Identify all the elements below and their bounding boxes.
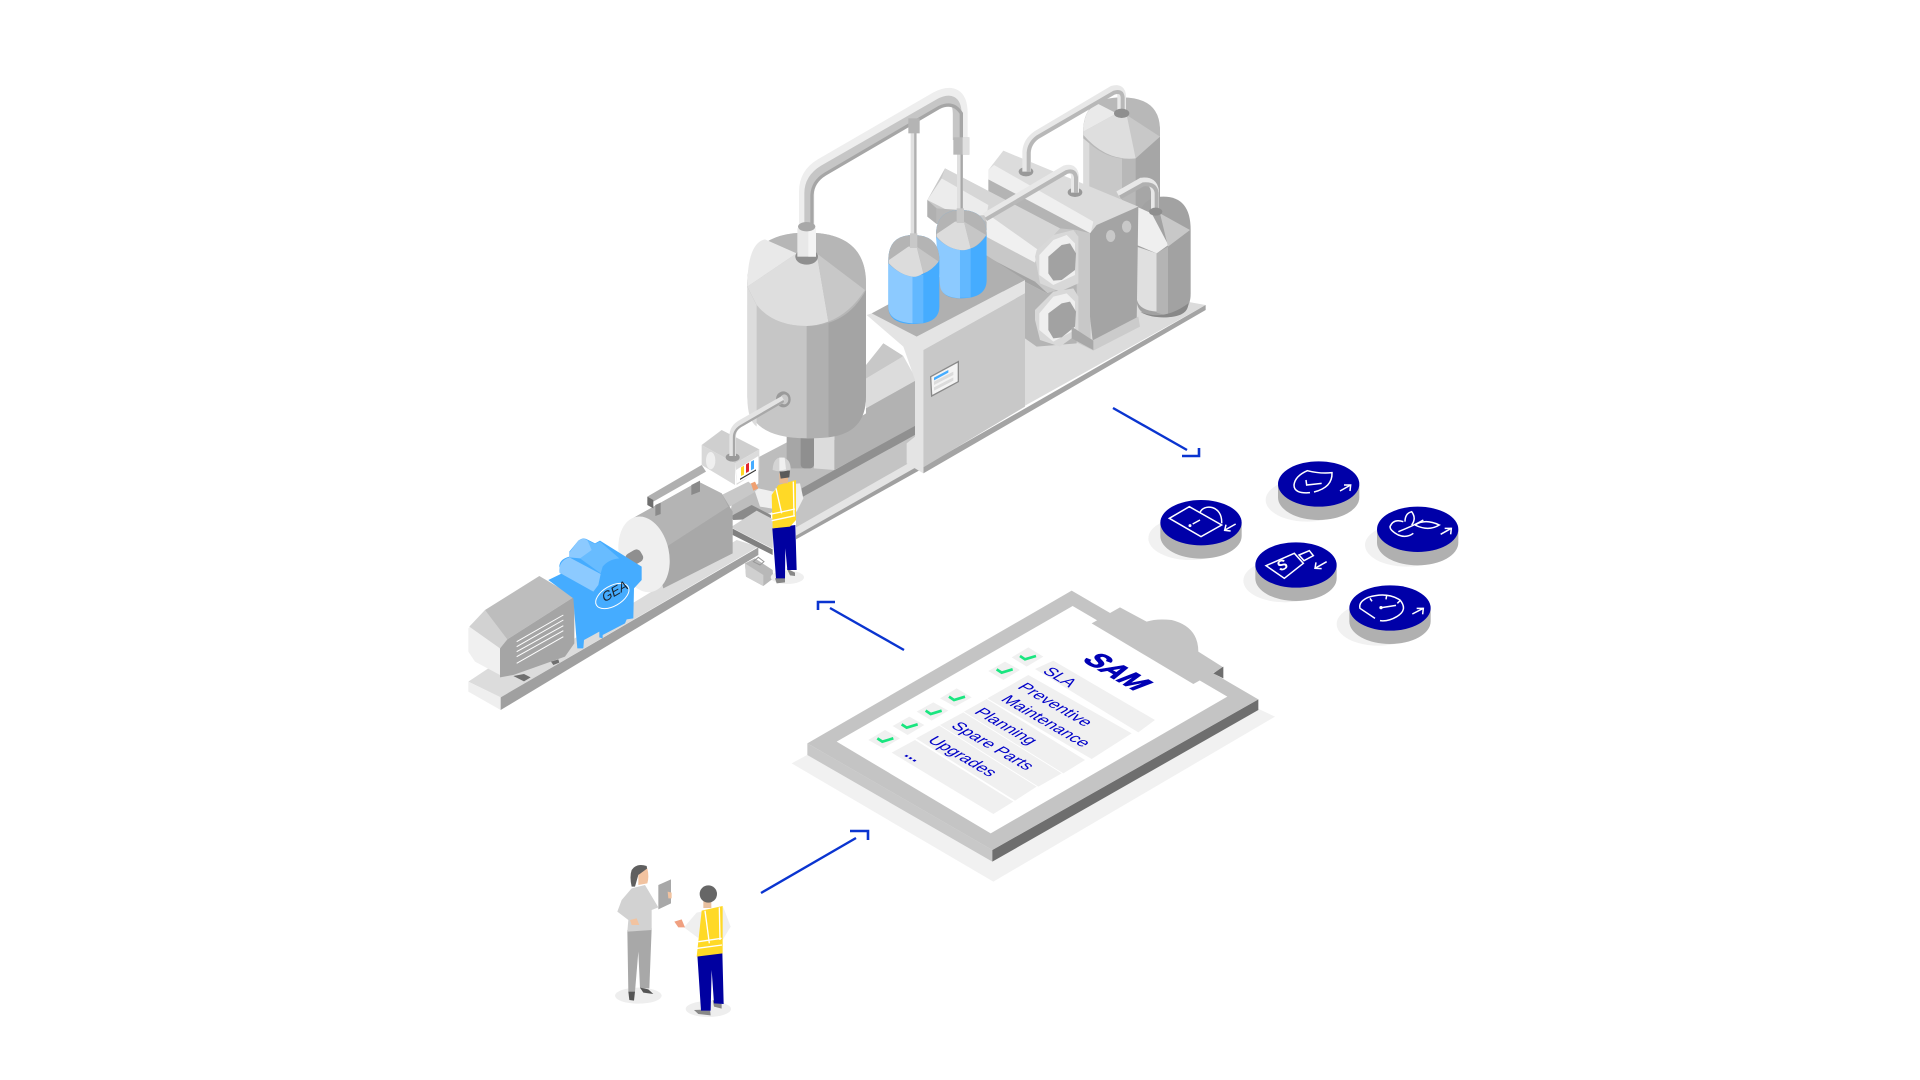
drum housing [612,482,733,597]
checklist labels [900,664,1098,779]
toolbox [745,557,773,586]
cabinet screen [931,362,958,396]
green check marks [877,656,1036,742]
checklist rows [868,647,1155,814]
lower machine body and floor [730,424,920,539]
instrument box [702,430,759,485]
clipboard shadow [792,703,1275,882]
pipe couplers and flanges [795,109,1162,265]
control block [988,151,1140,351]
left base platform [468,540,758,710]
right blue tank [936,210,987,298]
person: man in safety vest [674,885,731,1017]
coin: cost [1243,542,1337,602]
blue gearbox: GEA [601,577,629,606]
drum rail [647,465,706,516]
checklist labels: Maintenance [997,692,1096,750]
lower octagonal cylinder [1025,288,1093,350]
clipboard clip [1092,607,1223,684]
arrow: SAM to machine [818,602,904,650]
checklist labels: Spare Parts [947,719,1039,773]
back right tank [1083,97,1160,213]
coin: speedometer [1337,585,1431,646]
connecting pipe [733,399,784,456]
title: SAM: SAM [1077,648,1158,695]
arrow: team to SAM [761,831,868,893]
checklist labels: SLA [1038,664,1083,690]
arrow: machine to benefits [1113,408,1199,456]
clipboard board [807,591,1258,862]
SAM clipboard [792,591,1275,882]
machine operator [751,457,804,584]
benefit coins [1148,461,1458,646]
upper cylinder end cap [1035,230,1078,292]
upper octagonal cylinder [927,168,1077,294]
bottom right tank [1137,197,1191,317]
coin: shield [1266,461,1359,522]
overhead pipes [807,89,1157,240]
large vessel [747,233,866,468]
right base platform [923,280,1206,473]
industrial process line [468,89,1206,710]
motor [468,576,574,681]
coin: lock [1148,500,1242,560]
checklist labels: Preventive [1013,680,1098,729]
middle housing [803,343,917,487]
person: woman with clipboard [615,865,672,1004]
coin: leaf [1365,507,1458,567]
blue gearbox [548,538,642,648]
checklist labels: ... [900,748,928,764]
checklist labels: Planning [970,705,1042,747]
connector and worker table [722,482,773,555]
left blue tank [888,235,939,324]
two people talking [615,865,731,1017]
checklist labels: Upgrades [923,733,1002,779]
central cabinet [867,253,1025,473]
coin: cost: S [1275,557,1291,575]
